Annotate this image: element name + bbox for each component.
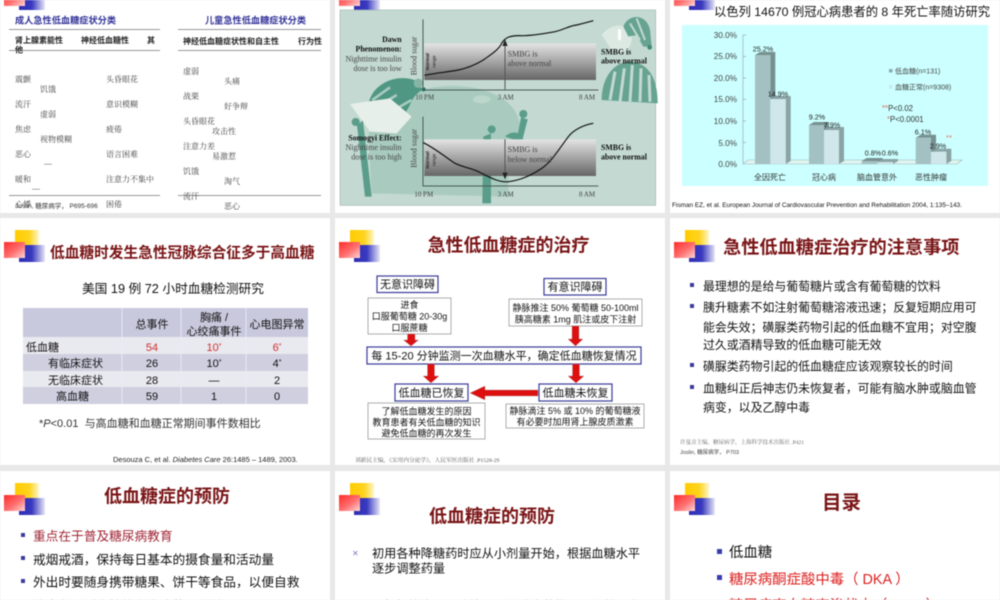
bars: malignancy — [916, 135, 951, 164]
table: adult symptoms: 意识模糊 — [106, 99, 138, 109]
bullet list: 初用各种降糖药时应从小剂量开始，根据血糖水平 — [372, 546, 640, 560]
chart: 3D bar chart of mortality: 5.0% — [718, 139, 737, 148]
footnote: *P<0.01 与高血糖和血糖正常期间事件数相比 — [39, 416, 261, 430]
legend: 低血糖(n=131) — [895, 66, 940, 76]
table: adult symptoms: 饥饿 — [40, 84, 56, 94]
table: events: * — [219, 359, 222, 366]
table: adult symptoms: 焦虑 — [15, 124, 32, 134]
bullet list: 重点在于普及糖尿病教育 — [33, 528, 173, 544]
chart: dawn phenomenon: 3 AM — [498, 94, 514, 102]
logo: slide corner squares — [4, 0, 45, 10]
chart: dawn phenomenon: Dawn — [382, 35, 402, 44]
table: adult symptoms: 视物模糊 — [40, 134, 72, 144]
panel: table of contents — [670, 471, 1000, 600]
illustration: woken man — [602, 17, 658, 103]
chart: 3D bar chart of mortality: 14.9% — [768, 90, 789, 98]
table: adult symptoms: 震颤 — [15, 74, 32, 84]
table: child symptoms: 注意力差 — [183, 141, 215, 151]
table: child symptoms: 头痛 — [224, 76, 240, 86]
bars: coronary disease — [809, 122, 844, 164]
contents list: 低血糖 — [729, 544, 772, 561]
bars: all-cause death — [755, 52, 791, 164]
title: 目录 — [822, 492, 861, 514]
box: drip — [506, 404, 644, 428]
panel: prevention part two — [335, 471, 665, 600]
table: events: 胸痛 / — [200, 310, 229, 324]
chart: dawn phenomenon: 10 PM — [415, 94, 434, 102]
table: events: * — [219, 343, 222, 350]
table: child symptoms: 淘气 — [224, 176, 240, 186]
chart: 3D bar chart of mortality: 2.9% — [930, 142, 947, 150]
table: child symptoms: 神经低血糖症状性和自主性 — [183, 36, 279, 46]
chart: 3D bar chart of mortality: 9.2% — [809, 112, 826, 122]
table: child symptoms: 饥饿 — [183, 166, 199, 176]
chart: dawn phenomenon: Phenomenon: — [356, 45, 402, 54]
table: adult symptoms: — — [43, 159, 53, 168]
chart: dawn phenomenon: above normal — [601, 57, 648, 66]
table: events: 高血糖 — [56, 389, 89, 403]
table: adult symptoms: 疲倦 — [106, 124, 122, 134]
table: adult symptoms: 他 — [15, 44, 23, 54]
title: 急性低血糖症治疗的注意事项 — [723, 236, 959, 258]
table: adult symptoms: 语言困难 — [106, 149, 138, 159]
table: events: 总事件 — [136, 317, 168, 331]
citation: Joslin: Joslin, 糖尿病学， P695-696 — [15, 201, 98, 210]
chart: Somogyi effect: Nighttime insulin — [346, 143, 402, 152]
chart: 3D bar chart of mortality: 0.0% — [718, 160, 737, 169]
chart: Somogyi effect: below normal — [508, 155, 553, 164]
table: events: 心绞痛事件 — [186, 324, 242, 338]
citation: Liu Xinmin: 刘新民主编，《实用内分泌学》，人民军医出版社 .P1528-29 — [355, 456, 500, 464]
chart: dawn phenomenon: 8 AM — [579, 94, 595, 102]
table: events: 28 — [146, 375, 158, 387]
arrow: left down to monitoring — [404, 334, 418, 346]
table: child symptoms: 行为性 — [298, 36, 322, 46]
table: child symptoms: 流汗 — [183, 191, 199, 201]
box: monitoring: 每 15-20 分钟监测一次血糖水平，确定低血糖恢复情况 — [371, 348, 637, 362]
box: oral glucose: 口服葡萄糖 20-30g — [372, 310, 447, 322]
bullet list: ✕ — [352, 549, 359, 558]
logo: slide corner squares — [674, 483, 715, 515]
bullet list — [690, 280, 977, 414]
arrow: not recovered to recovered — [470, 386, 538, 400]
table: adult symptoms: 肾上腺素能性 — [15, 35, 63, 45]
panel: dawn phenomenon and Somogyi effect — [335, 0, 665, 213]
box: no consciousness disorder: 无意识障碍 — [380, 277, 435, 291]
logo: slide corner squares — [339, 483, 380, 515]
table: events: 4 — [273, 358, 279, 370]
arrow: down to not recovered — [568, 364, 584, 383]
chart: nighttime blood sugar illustration — [340, 10, 658, 205]
contents list: 糖尿病酮症酸中毒（ DKA ） — [729, 571, 910, 588]
table: events: 26 — [146, 358, 158, 370]
table: adult symptoms: 头昏眼花 — [106, 74, 138, 84]
chart: dawn phenomenon: dose is too low — [354, 64, 402, 73]
table: adult symptoms: 恶心 — [15, 150, 32, 159]
table: child symptoms: 战栗 — [183, 91, 199, 101]
bullet list: 磺脲类药物引起的低血糖症应该观察较长的时间 — [703, 360, 953, 374]
box: monitoring — [367, 347, 641, 364]
chart: Somogyi effect: Somogyi Effect: — [348, 133, 402, 142]
annotation: p values: **P<0.02 — [882, 104, 913, 113]
bullet list: 血糖纠正后神志仍未恢复者，可能有脑水肿或脑血管 — [703, 382, 977, 396]
title: 低血糖症的预防 — [104, 486, 230, 506]
arrow: down to recovered — [423, 364, 439, 383]
box: education: 教育患者有关低血糖的知识 — [372, 416, 481, 428]
chart: Somogyi effect — [346, 117, 648, 198]
table: events — [23, 308, 308, 404]
flowchart — [367, 276, 644, 439]
panel: Israeli mortality follow-up study — [670, 0, 1000, 213]
chart: 3D bar chart of mortality: 全因死亡 — [754, 172, 786, 182]
heading: adult symptoms: 成人急性低血糖症状分类 — [15, 14, 116, 26]
chart: 3D bar chart of mortality: 冠心病 — [812, 172, 836, 182]
annotation: p values — [882, 104, 924, 124]
logo: slide corner squares — [4, 483, 45, 515]
table: child symptoms — [178, 30, 322, 211]
box: recovered — [395, 384, 468, 401]
table: adult symptoms: — — [31, 184, 41, 193]
table: adult symptoms: 困倦 — [106, 199, 122, 209]
bullet list: 外出时要随身携带糖果、饼干等食品，以便自救 — [33, 574, 300, 590]
arrow: right down to monitoring — [568, 326, 583, 346]
chart: Somogyi effect: range — [432, 153, 438, 166]
table: adult symptoms — [9, 30, 160, 209]
table: adult symptoms: 其 — [147, 35, 155, 45]
chart: 3D bar chart of mortality: 恶性肿瘤 — [915, 172, 947, 182]
bullet list: 逐步调整药量 — [372, 560, 445, 576]
chart: 3D bar chart of mortality: 15.0% — [714, 95, 737, 104]
illustration: sleeper in bed — [350, 78, 528, 203]
chart: 3D bar chart of mortality: 7.9% — [824, 120, 841, 130]
table: events: 10 — [207, 342, 219, 354]
chart: 3D bar chart of mortality: 10.0% — [714, 117, 737, 126]
panel: treatment flowchart — [335, 218, 665, 465]
table: adult symptoms: 神经低血糖性 — [81, 35, 129, 45]
heading: study title: 以色列 14670 例冠心病患者的 8 年死亡率随访研究 — [714, 4, 990, 19]
chart: dawn phenomenon: Normal — [425, 52, 431, 70]
chart: dawn phenomenon — [346, 19, 648, 102]
chart: dawn phenomenon: range — [432, 55, 438, 68]
chart: Somogyi effect: 10 PM — [414, 190, 433, 198]
bullet list: 胰升糖素不如注射葡萄糖溶液迅速；反复短期应用可 — [703, 300, 977, 314]
bullet list — [21, 528, 300, 600]
chart: 3D bar chart of mortality: 30.0% — [714, 31, 737, 40]
table: events: 59 — [146, 391, 158, 403]
chart: 3D bar chart of mortality: 脑血管意外 — [857, 172, 897, 182]
box: education: 避免低血糖的再次发生 — [381, 428, 472, 438]
chart: Somogyi effect: dose is too high — [351, 152, 402, 161]
chart: Somogyi effect: 8 AM — [579, 190, 595, 198]
table: child symptoms: 易激惹 — [212, 151, 237, 161]
chart: dawn phenomenon: Blood sugar — [410, 36, 419, 75]
contents list — [717, 544, 940, 600]
box: consciousness disorder: 有意识障碍 — [548, 280, 602, 294]
box: consciousness disorder — [544, 278, 606, 295]
box: no consciousness disorder — [377, 276, 438, 292]
chart: 3D bar chart of mortality: 25.2% — [753, 44, 774, 54]
table: events: — — [208, 375, 220, 387]
box: not recovered — [539, 384, 612, 401]
box: recovered: 低血糖已恢复 — [398, 386, 464, 400]
box: oral glucose: 口服蔗糖 — [391, 322, 428, 333]
legend — [889, 66, 951, 92]
table: adult symptoms: 暖和 — [15, 174, 31, 184]
table: adult symptoms: 心悸 — [15, 199, 31, 209]
table: events: 0 — [274, 391, 280, 403]
logo: slide corner squares — [339, 0, 380, 10]
bullet list: 病变，以及乙醇中毒 — [703, 400, 810, 414]
bullet list: 最理想的是给与葡萄糖片或含有葡萄糖的饮料 — [703, 280, 941, 294]
logo: slide corner squares — [674, 0, 715, 10]
chart: 3D bar chart of mortality: ** — [946, 134, 952, 143]
chart: 3D bar chart of mortality — [682, 25, 988, 186]
chart: Somogyi effect: Blood sugar — [410, 129, 419, 168]
logo: slide corner squares — [674, 230, 715, 262]
table: events: 10 — [207, 358, 219, 370]
table: child symptoms: 好争辩 — [224, 101, 248, 111]
chart: Somogyi effect: above normal — [601, 153, 648, 162]
title: 低血糖症的预防 — [429, 506, 555, 526]
chart: dawn phenomenon: SMBG is — [508, 50, 538, 59]
title: 低血糖时发生急性冠脉综合征多于高血糖 — [50, 244, 315, 262]
chart: dawn phenomenon: Nighttime insulin — [346, 55, 402, 64]
bullet list — [352, 546, 640, 600]
table: events: 有临床症状 — [48, 356, 103, 370]
box: drip: 静脉滴注 5% 或 10% 的葡萄糖液 — [509, 405, 641, 416]
heading: child symptoms: 儿童急性低血糖症状分类 — [205, 14, 306, 26]
box: not recovered: 低血糖未恢复 — [542, 386, 608, 400]
chart: Somogyi effect: 3 AM — [498, 190, 514, 198]
annotation: p values: *P<0.0001 — [887, 115, 924, 124]
legend: 血糖正常(n=9308) — [895, 82, 951, 92]
citation: Desouza: Desouza C, et al. Diabetes Care 26:1485 – 1489, 2003. — [113, 455, 298, 464]
table: events: * — [279, 359, 282, 366]
bars: stroke — [862, 158, 898, 164]
table: events: * — [279, 343, 282, 350]
table: adult symptoms: 注意力不集中 — [106, 174, 154, 184]
table: events: 54 — [146, 342, 158, 354]
logo: slide corner squares — [339, 230, 380, 262]
citation: Fisman: Fisman EZ, et al. European Journal of Cardiovascular Prevention and Rehabilitation 2004, 1:135–143. — [672, 203, 962, 209]
table: events: 6 — [273, 342, 279, 354]
table: events: 无临床症状 — [48, 373, 103, 387]
bullet list: 戒烟戒酒，保持每日基本的摄食量和活动量 — [33, 552, 274, 567]
box: education: 了解低血糖发生的原因 — [381, 406, 472, 416]
chart: 3D bar chart of mortality: 0.6% — [882, 148, 899, 158]
panel: prevention part one — [0, 471, 330, 600]
table: child symptoms: 虚弱 — [183, 66, 199, 76]
table: child symptoms: 头昏眼花 — [183, 116, 215, 126]
table: events: 心电图异常 — [250, 318, 304, 331]
table: adult symptoms: 虚弱 — [40, 109, 56, 119]
chart: 3D bar chart of mortality: 25.0% — [714, 52, 737, 61]
bullet list: 能会失效；磺脲类药物引起的低血糖不宜用；对空腹 — [703, 320, 977, 334]
table: events: 低血糖 — [26, 340, 59, 354]
table: adult symptoms: 流汗 — [15, 99, 31, 109]
logo: slide corner squares — [4, 230, 45, 262]
chart: Somogyi effect: Normal — [425, 151, 431, 169]
panel: acute coronary syndrome table — [0, 218, 330, 465]
chart: dawn phenomenon: above normal — [508, 59, 552, 68]
table: events: 2 — [274, 375, 280, 387]
chart: 3D bar chart of mortality: 0.8% — [865, 148, 882, 158]
box: intravenous glucose: 胰高糖素 1mg 肌注或皮下注射 — [515, 314, 636, 324]
chart: dawn phenomenon: SMBG is — [601, 47, 631, 56]
citations — [680, 438, 804, 456]
box: oral glucose — [368, 298, 451, 334]
chart: 3D bar chart of mortality: 20.0% — [714, 74, 737, 83]
panel: adult and child hypoglycemia symptoms — [0, 0, 330, 213]
chart: Somogyi effect: SMBG is — [601, 143, 631, 152]
title: 急性低血糖症的治疗 — [428, 234, 590, 256]
box: education — [368, 403, 485, 439]
table: child symptoms: 恶心 — [224, 202, 241, 211]
bullet list: 过久或酒精导致的低血糖可能无效 — [703, 338, 881, 352]
box: intravenous glucose — [509, 299, 642, 326]
subtitle: 美国 19 例 72 小时血糖检测研究 — [82, 281, 264, 296]
table: events: 1 — [211, 391, 217, 403]
box: oral glucose: 进食 — [400, 299, 419, 310]
box: drip: 有必要时加用肾上腺皮质激素 — [516, 416, 634, 427]
citations: Joslin, 糖尿病学， P703 — [680, 448, 739, 456]
table: child symptoms: 攻击性 — [212, 126, 236, 136]
chart: 3D bar chart of mortality: 6.1% — [915, 128, 932, 136]
panel: treatment notes — [670, 218, 1000, 465]
citations: 许曼音主编，糖尿病学，上海科学技术出版社 .P421 — [680, 438, 804, 446]
chart: Somogyi effect: SMBG is — [508, 145, 538, 154]
box: intravenous glucose: 静脉推注 50% 葡萄糖 50-100ml — [512, 302, 639, 313]
